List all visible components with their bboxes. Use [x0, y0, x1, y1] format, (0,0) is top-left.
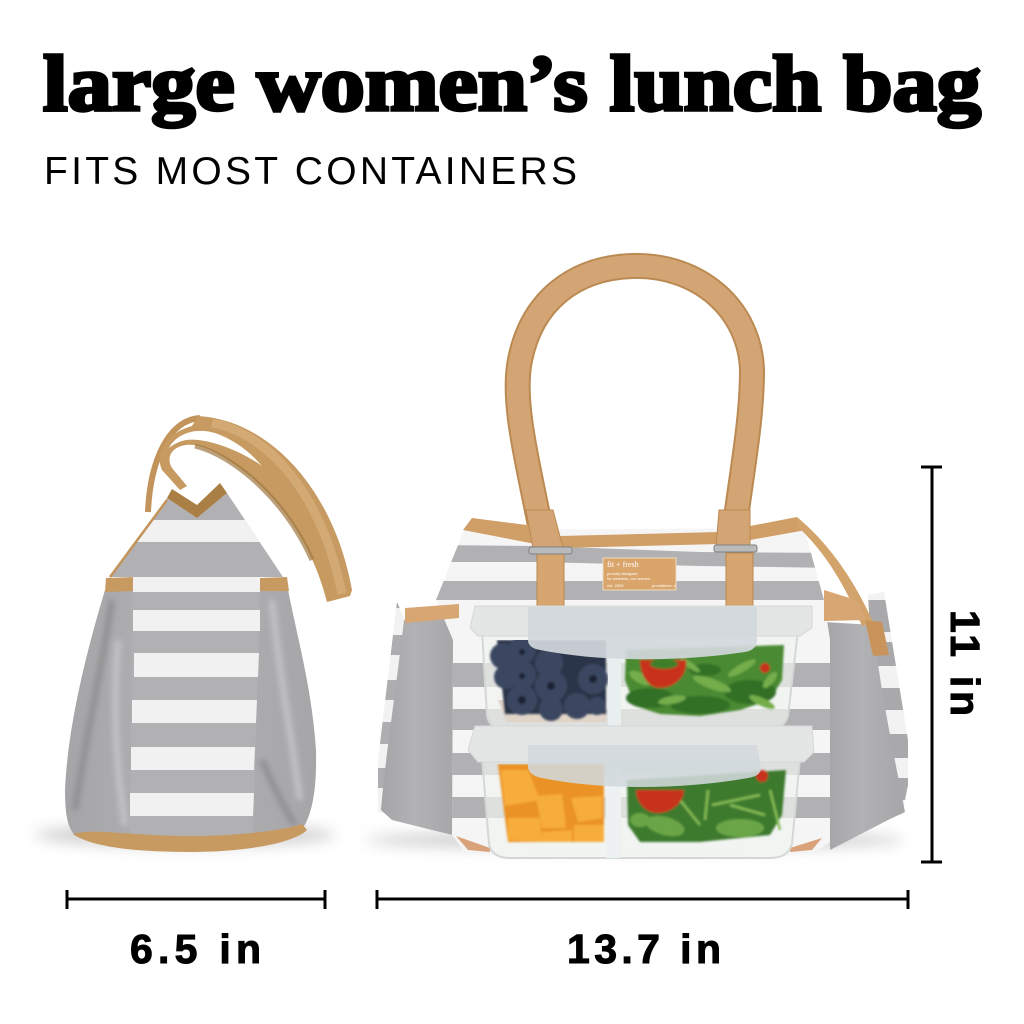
- top container divider: [608, 640, 621, 730]
- bottom container glass body: [482, 758, 800, 858]
- side bag mesh pocket: [65, 590, 316, 836]
- dimension: side width: [67, 890, 325, 972]
- lower right strap: [726, 553, 753, 606]
- left metal buckle: [529, 547, 572, 554]
- right side pocket stripes: [868, 592, 908, 815]
- brand label: fit + fresh: [607, 560, 639, 569]
- top container glass body: [482, 630, 798, 731]
- height line: [921, 467, 942, 862]
- length line: [377, 890, 908, 909]
- upper right strap: [716, 510, 750, 548]
- width label: 6.5 in: [130, 926, 261, 972]
- top container latch: [528, 607, 757, 659]
- strap tab: [865, 620, 889, 656]
- striped body: [430, 525, 840, 855]
- bottom container lid: [468, 726, 814, 762]
- side bag handles: [148, 416, 352, 602]
- mango cubes: [498, 764, 604, 842]
- side bag roof stripes: [112, 493, 283, 577]
- subtitle: FITS MOST CONTAINERS: [44, 150, 577, 193]
- blueberries: [490, 636, 608, 722]
- side bag tan bands: [105, 577, 289, 592]
- front bag handle: [518, 266, 752, 540]
- width line: [67, 890, 325, 909]
- side bag striped panel: [130, 577, 260, 836]
- bottom salad: [627, 770, 786, 842]
- brand label: proudly designed: [607, 571, 637, 576]
- top salad: [625, 645, 784, 716]
- bottom container divider: [606, 768, 621, 858]
- lower left strap: [537, 553, 564, 606]
- bottom glass container: [468, 726, 814, 858]
- brand label: [603, 558, 676, 590]
- brand label: for wellness, our women: [607, 576, 650, 581]
- top glass container: [470, 606, 812, 731]
- top tan trim: [463, 517, 806, 548]
- base trim: [456, 836, 822, 852]
- upper left strap: [526, 510, 563, 548]
- shadow under front bag: [365, 830, 905, 850]
- title: large women’s lunch bag: [43, 41, 981, 128]
- right metal buckle: [714, 545, 757, 552]
- left side pocket stripes: [378, 602, 405, 814]
- tomato: [640, 660, 686, 688]
- bottom tomato: [636, 790, 684, 813]
- side bag tan base: [73, 824, 307, 852]
- left pocket trim: [405, 604, 459, 623]
- right pocket trim: [824, 590, 866, 621]
- bottom container latch: [528, 745, 761, 787]
- height label: 11 in: [942, 610, 988, 716]
- brand label: est. 2005: [607, 583, 624, 588]
- gap between handle loops: [169, 431, 262, 466]
- length label: 13.7 in: [567, 926, 721, 972]
- side bag roof trim: [110, 483, 227, 577]
- left mesh pocket: [381, 616, 456, 835]
- side bag mesh folds: [75, 600, 300, 825]
- shadow under side bag: [35, 823, 335, 847]
- side strap: [797, 517, 873, 626]
- right mesh pocket: [825, 622, 905, 850]
- dimension: front width: [377, 890, 908, 972]
- side view bag: [35, 416, 352, 852]
- brand label: providence, ri: [652, 583, 676, 588]
- dimension: height: [921, 467, 988, 862]
- front view bag: [365, 266, 915, 858]
- top container lid: [470, 606, 812, 636]
